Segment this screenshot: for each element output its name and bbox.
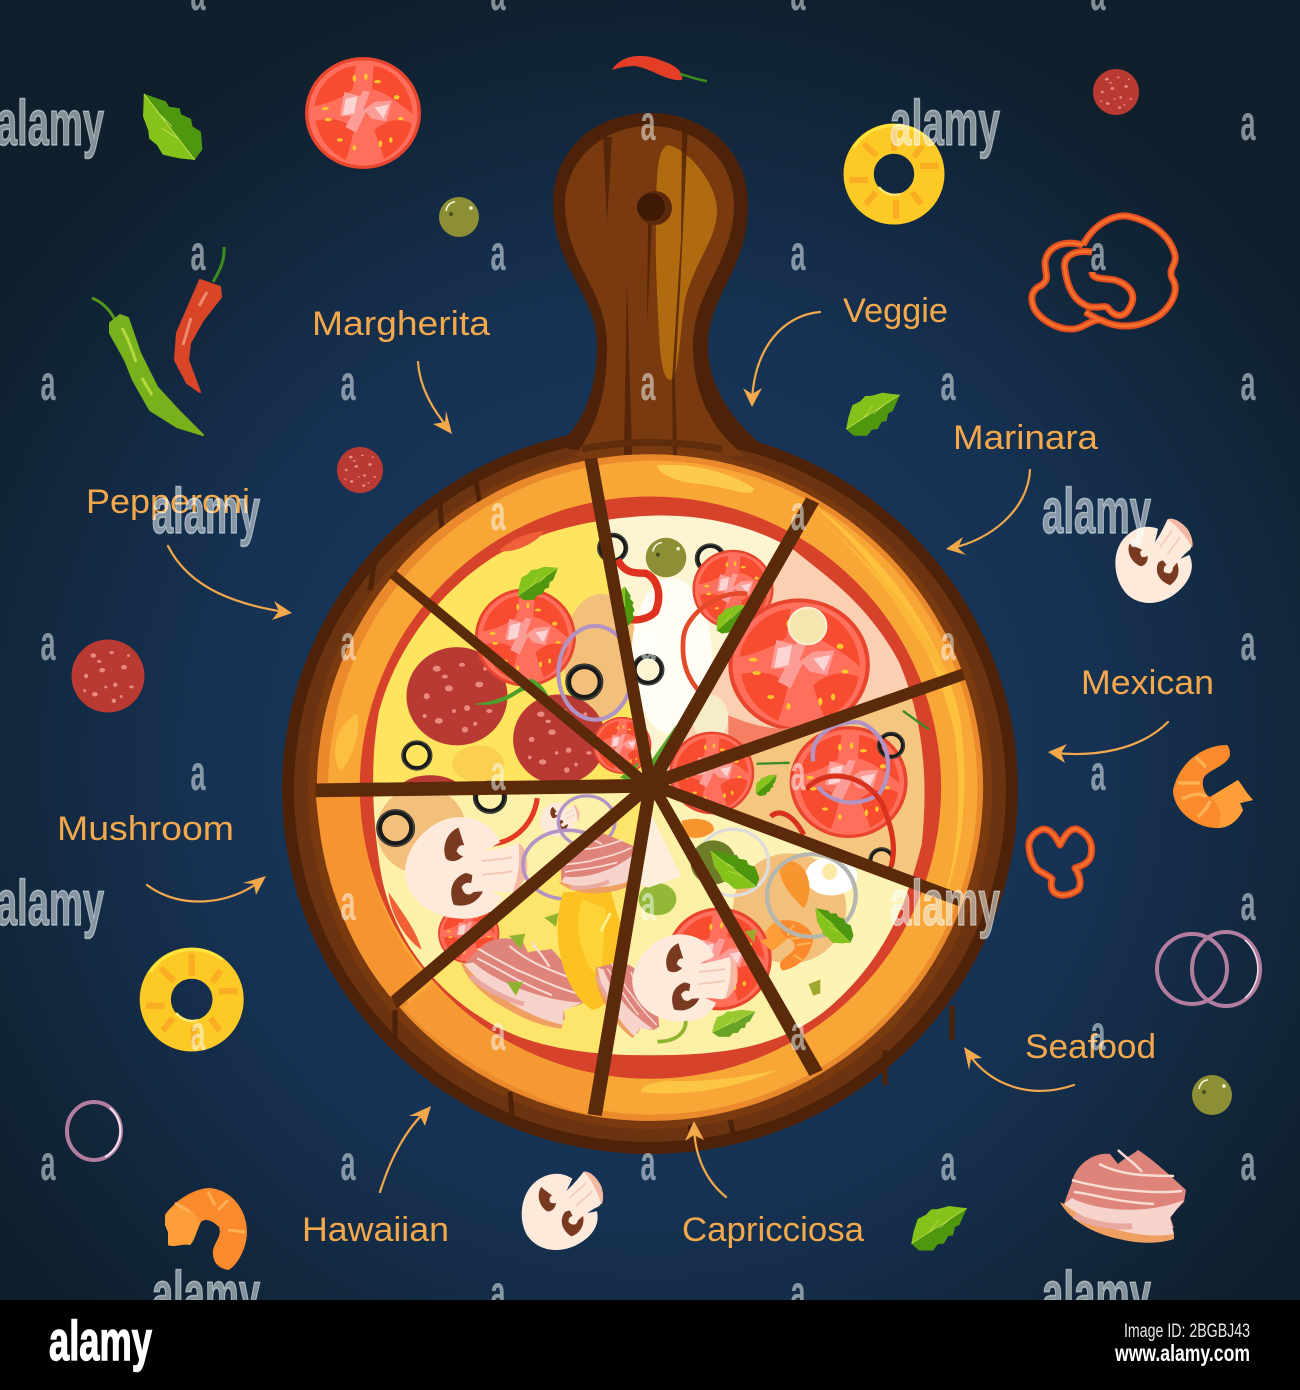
basil leaf [846, 390, 900, 439]
watermark letters: a [640, 615, 656, 671]
pepperoni slice [513, 694, 606, 784]
arrow: Capricciosa [685, 1121, 726, 1197]
label: Mushroom: Mushroom [57, 810, 234, 848]
onion ring gray [767, 854, 856, 937]
shrimp [1173, 745, 1253, 828]
red pepper [617, 559, 659, 620]
footer cover [0, 1300, 1300, 1390]
basil leaf [143, 94, 202, 160]
slice: Hawaiian cheese [433, 800, 642, 1054]
watermark wordmarks: alamy [0, 867, 104, 939]
olive ring [377, 810, 414, 846]
watermark letters: a [640, 875, 656, 931]
arrow: Margherita [418, 362, 452, 434]
label: Hawaiian: Hawaiian [302, 1211, 449, 1249]
round board [282, 426, 1018, 1154]
tomato [666, 907, 772, 1010]
footer bar [0, 1300, 1300, 1390]
olive ring [474, 782, 506, 813]
watermark letters: a [40, 1135, 56, 1191]
garlic [789, 608, 826, 644]
red pepper strip [488, 798, 537, 844]
arrow: Hawaiian [380, 1106, 431, 1192]
watermark letters: a [1240, 95, 1256, 151]
pepperoni large [72, 640, 144, 712]
Margherita tomato [475, 588, 576, 687]
watermark letters: a [790, 485, 806, 541]
olive [1192, 1075, 1232, 1115]
basil [754, 775, 779, 796]
thin stem [757, 711, 929, 764]
tomato slice [305, 57, 421, 169]
watermark letters: a [340, 615, 356, 671]
basil [715, 605, 748, 634]
website: www.alamy.com [1114, 1340, 1250, 1366]
arrow: Seafood [964, 1047, 1074, 1091]
chili: top [612, 56, 707, 81]
shrimp [757, 916, 818, 973]
label: Pepperoni: Pepperoni [86, 483, 250, 521]
tan cheese patches [377, 594, 846, 963]
watermark letters: a [40, 615, 56, 671]
watermark wordmarks: alamy [1042, 475, 1151, 547]
tomato center [669, 732, 754, 814]
watermark letters: a [940, 355, 956, 411]
bacon [1060, 1150, 1186, 1243]
label: Mexican: Mexican [1081, 664, 1214, 702]
slice cuts [315, 457, 965, 1116]
egg [805, 857, 857, 896]
bell pepper rings [1032, 216, 1175, 329]
cheese slices [373, 516, 924, 1056]
egg [692, 695, 728, 741]
pepperoni small [1093, 69, 1139, 115]
label: Veggie: Veggie [843, 292, 948, 330]
big tomato [728, 598, 870, 732]
sauce ring [360, 496, 941, 1079]
Margherita basil [518, 566, 558, 601]
pizza board with handle [282, 113, 1018, 1154]
arrow: Veggie [743, 312, 820, 407]
pepperoni slice [406, 647, 507, 745]
watermark letters: a [640, 95, 656, 151]
tomato bit [593, 717, 651, 774]
watermark letters: a [940, 1135, 956, 1191]
basil [815, 903, 855, 948]
pepperoni partial [402, 775, 459, 784]
olive ring [869, 848, 894, 872]
mushroom [632, 934, 738, 1022]
label: Margherita: Margherita [312, 305, 490, 343]
basil [712, 1008, 755, 1040]
watermark letters: a [340, 1135, 356, 1191]
tomato under mushroom [438, 904, 499, 963]
watermark letters: a [1240, 355, 1256, 411]
watermark letters: a [790, 745, 806, 801]
crust [315, 454, 983, 1121]
olive [691, 840, 736, 885]
chili: green [92, 298, 203, 435]
red pepper ring [771, 776, 893, 867]
tomato [790, 726, 908, 838]
watermark letters: a [640, 1135, 656, 1191]
Mushroom pieces [377, 782, 615, 963]
black olive [568, 666, 600, 698]
image id: Image ID: 2BGBJ43 [1124, 1321, 1250, 1342]
thin leaf [473, 679, 549, 705]
Capricciosa pieces [579, 807, 772, 1046]
watermark letters: a [940, 615, 956, 671]
slice: Mexican cheese [668, 698, 924, 876]
shrimp [165, 1188, 247, 1270]
arrow: Pepperoni [168, 546, 292, 620]
green ring [658, 1021, 686, 1042]
onion ring [558, 626, 632, 720]
mushroom [405, 817, 527, 919]
slice: Mushroom cheese [373, 792, 630, 968]
onion ring [523, 830, 613, 899]
watermark letters: a [490, 225, 506, 281]
watermark letters: a [790, 225, 806, 281]
onion ring [558, 796, 615, 846]
watermark letters: a [190, 745, 206, 801]
small mushroom [535, 796, 585, 841]
Mexican pieces [669, 711, 929, 872]
watermark letters: a [1090, 225, 1106, 281]
basil [710, 841, 761, 896]
watermark wordmarks: alamy [0, 87, 104, 159]
tomato [692, 550, 774, 629]
pineapple ring [146, 949, 237, 1045]
watermark letters: a [1090, 745, 1106, 801]
slice: Veggie cheese [608, 516, 780, 760]
pineapple chunk [558, 890, 626, 1010]
green olive [639, 883, 676, 915]
slice: Capricciosa cheese [612, 800, 786, 1056]
label: Marinara: Marinara [953, 419, 1098, 457]
bell pepper ring [1029, 829, 1092, 895]
watermark letters: a [640, 355, 656, 411]
bacon [449, 922, 598, 1035]
watermark letters: a [790, 1005, 806, 1061]
bacon center [546, 820, 646, 908]
basil leaf [911, 1203, 967, 1254]
pepperoni toppings [402, 647, 606, 784]
arrow: Mexican [1048, 722, 1168, 763]
watermark wordmarks: alamy [152, 475, 260, 547]
Veggie pieces [593, 534, 774, 774]
olive ring top-left [598, 534, 627, 562]
Seafood pieces [681, 819, 857, 996]
label: Capricciosa: Capricciosa [682, 1211, 864, 1249]
basil [603, 586, 647, 629]
mushroom upper [629, 807, 681, 888]
slice: Marinara cheese [666, 549, 908, 772]
pizza [315, 454, 984, 1121]
watermark letters: a [190, 225, 206, 281]
olive ring top [696, 544, 725, 573]
watermark letters: a [190, 1005, 206, 1061]
watermark letters: a [490, 485, 506, 541]
salmon patch [728, 716, 799, 748]
green bit [745, 929, 820, 996]
watermark letters: a [1240, 615, 1256, 671]
Marinara pieces [728, 598, 870, 748]
slice: Pepperoni cheese [373, 612, 626, 783]
watermark letters: a [790, 1265, 806, 1321]
Hawaiian pieces [449, 820, 646, 1035]
mushroom [1097, 501, 1214, 619]
slice: Seafood cheese [666, 796, 909, 1028]
pepperoni small [337, 447, 383, 493]
shrimp [681, 819, 809, 908]
watermark wordmarks [0, 87, 1151, 1330]
watermark letters: a [490, 1265, 506, 1321]
green bits [507, 913, 558, 996]
onion rings [1157, 932, 1260, 1006]
pineapple ring [850, 125, 938, 218]
watermark wordmarks: alamy [890, 87, 1000, 159]
watermark letters: a [40, 355, 56, 411]
watermark letters: a [1090, 1005, 1106, 1061]
mushroom [505, 1152, 621, 1265]
olive [439, 197, 479, 237]
watermark wordmarks: alamy [152, 1258, 260, 1330]
bacon [579, 946, 677, 1046]
watermark letters: a [340, 875, 356, 931]
watermark wordmarks: alamy [890, 867, 1000, 939]
watermark letters: a [490, 745, 506, 801]
chili: red [175, 247, 224, 392]
sauce streaks [389, 531, 544, 950]
center leaf [620, 725, 676, 782]
olive ring [878, 733, 904, 758]
slice: Margherita cheese [438, 522, 642, 773]
olive [646, 538, 686, 577]
arrow: Marinara [946, 470, 1030, 555]
watermark wordmarks: alamy [1042, 1258, 1151, 1330]
footer logo: alamy [49, 1309, 152, 1372]
red pepper ring [683, 593, 747, 697]
watermark letters: a [490, 1005, 506, 1061]
label: Seafood: Seafood [1025, 1028, 1156, 1066]
onion ring [67, 1102, 121, 1160]
white patch [632, 578, 712, 734]
olive ring center [633, 655, 663, 685]
olive ring [567, 665, 602, 699]
board handle [553, 113, 768, 456]
onion ring white [698, 829, 768, 896]
watermark letters: a [1240, 875, 1256, 931]
arrow: Mushroom [147, 876, 266, 902]
watermark letters: a [1240, 1135, 1256, 1191]
olive ring [402, 741, 431, 770]
onion ring [813, 722, 888, 802]
watermark letters: a [340, 355, 356, 411]
